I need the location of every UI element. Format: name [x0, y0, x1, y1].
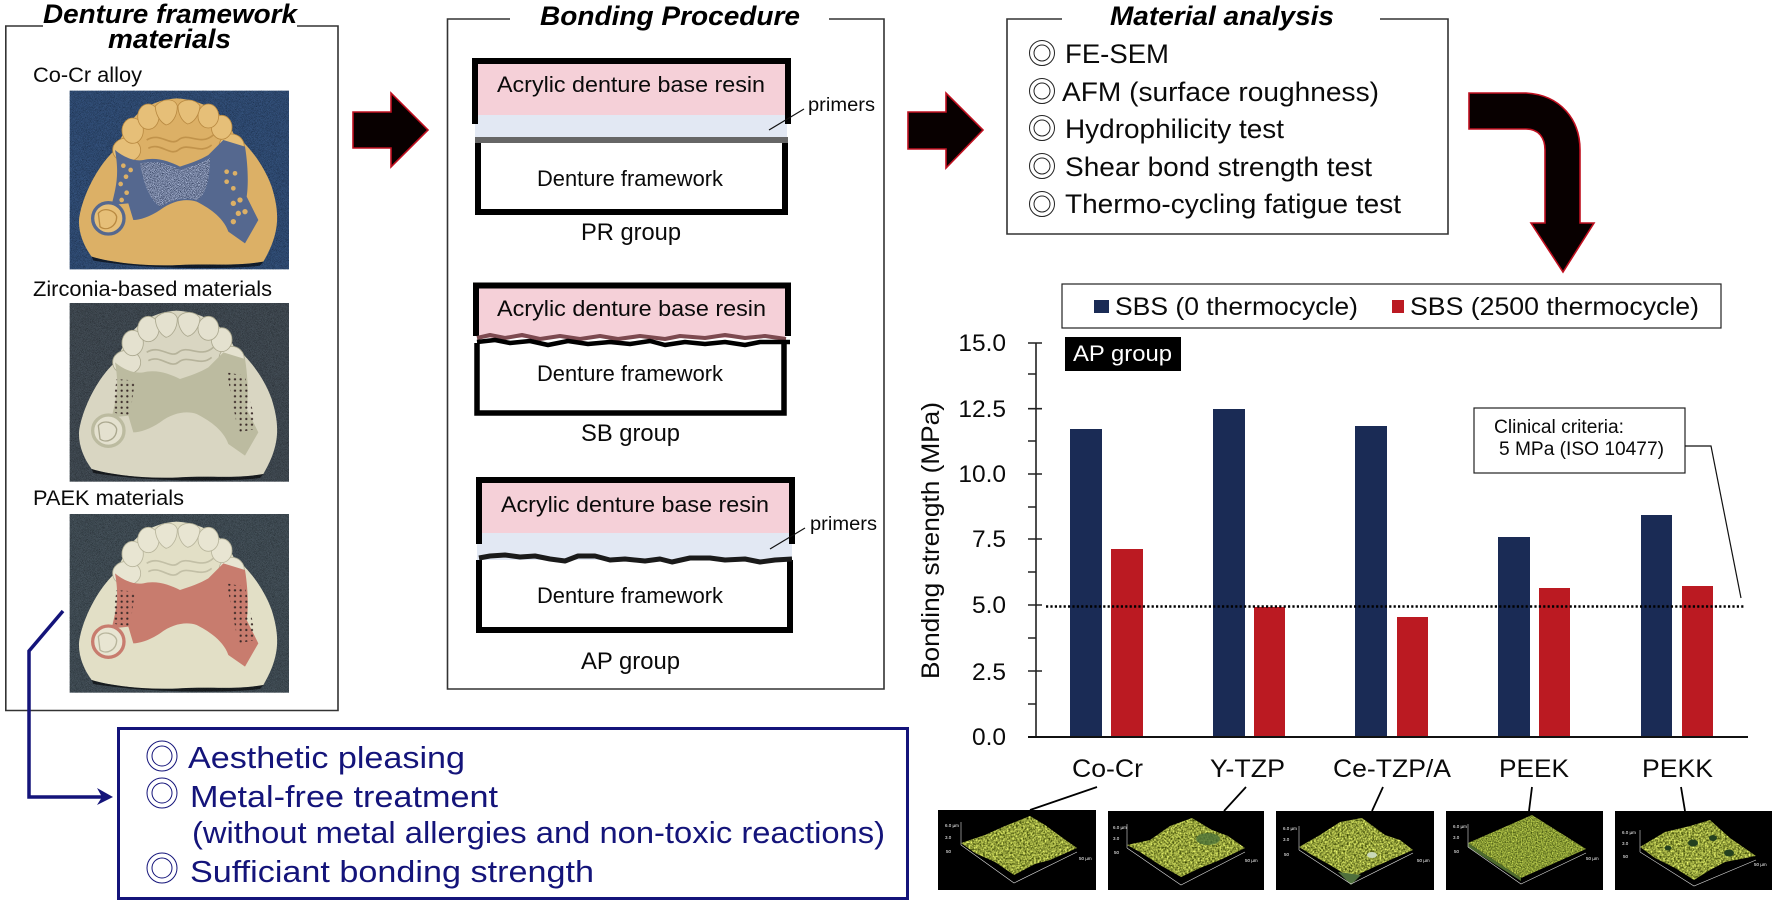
group tag: AP group: AP group [1073, 341, 1172, 366]
label: PAEK materials: PAEK materials [33, 486, 184, 510]
photo: PAEK framework on cast [70, 514, 289, 693]
AFM thumbnail: Ce-TZP/A: 50 [1284, 852, 1290, 857]
AFM thumbnail: Ce-TZP/A: 3.0 [1283, 837, 1290, 842]
list: analysis methods: FE-SEM [1065, 39, 1169, 69]
AFM thumbnail: Y-TZP: 50 µm [1245, 858, 1258, 863]
threshold line: 5 MPa [1046, 605, 1745, 608]
category labels: Co-Cr [1072, 755, 1143, 783]
AFM thumbnail: PEKK [1615, 787, 1772, 890]
diagram: SB group: Denture framework [537, 361, 724, 386]
heading: bonding procedure: Bonding Procedure [540, 1, 800, 31]
arrow: bonding to analysis [908, 93, 983, 168]
AFM thumbnail: PEEK: 6.0 µm [1453, 824, 1467, 829]
diagram: PR group: Denture framework [537, 166, 724, 191]
list: analysis methods: Hydrophilicity test [1065, 114, 1285, 144]
list: analysis methods: Shear bond strength test [1065, 152, 1373, 182]
AFM thumbnail: Co-Cr: 3.0 [945, 835, 952, 840]
benefits text: (without metal allergies and non-toxic reactions) [192, 815, 885, 850]
arrow: materials to bonding [353, 93, 428, 167]
bars: Co-Cr [1070, 429, 1143, 736]
AFM thumbnail: Y-TZP [1108, 787, 1264, 890]
callout: clinical criteria: 5 MPa (ISO 10477) [1499, 439, 1664, 460]
arrow: analysis to chart [1469, 93, 1594, 272]
y axis with ticks [1028, 343, 1748, 737]
photo: zirconia-based framework on cast [70, 303, 289, 482]
AFM thumbnail: PEEK: 3.0 [1453, 835, 1460, 840]
AFM thumbnail: Ce-TZP/A: 50 µm [1417, 858, 1430, 863]
y axis tick labels: 2.5 [972, 659, 1006, 686]
benefits text: Aesthetic pleasing [188, 740, 465, 775]
chart legend [1062, 284, 1721, 328]
y axis tick labels: 10.0 [958, 461, 1006, 488]
bars: PEEK [1498, 537, 1570, 736]
panel: benefits of PAEK [118, 728, 908, 898]
AFM thumbnail: Y-TZP: 6.0 µm [1113, 825, 1127, 830]
diagram: AP group: AP group [581, 648, 680, 675]
AFM thumbnail: PEKK: 3.0 [1622, 841, 1629, 846]
bullet icons [147, 741, 177, 883]
diagram: SB group: SB group [581, 420, 680, 447]
diagram: PR group: primers [808, 95, 875, 116]
bar chart: bonding strength [917, 330, 1748, 783]
y axis tick labels: 0.0 [972, 724, 1006, 751]
y axis tick labels: 5.0 [972, 592, 1006, 619]
AFM thumbnail: PEKK: 50 µm [1754, 862, 1767, 867]
AFM thumbnail: PEEK: 50 [1454, 849, 1460, 854]
callout: clinical criteria: Clinical criteria: [1494, 417, 1624, 438]
panel: bonding procedure [448, 1, 884, 689]
AFM thumbnail: PEKK: 50 [1623, 854, 1629, 859]
bars: Y-TZP [1213, 409, 1285, 736]
AFM thumbnail: Co-Cr: 6.0 µm [945, 823, 959, 828]
y axis tick labels [958, 330, 1006, 751]
panel: material analysis [1007, 1, 1448, 234]
label: Co-Cr alloy: Co-Cr alloy [33, 63, 142, 87]
group tag: AP group [1065, 337, 1181, 371]
y axis title: Bonding strength (MPa) [917, 402, 945, 679]
diagram: PR group: Acrylic denture base resin [497, 72, 765, 97]
connector arrow: PAEK to benefits [29, 611, 113, 805]
AFM thumbnail: Y-TZP: 3.0 [1113, 836, 1120, 841]
chart legend: SBS (0 thermocycle) [1115, 293, 1358, 321]
bars: Ce-TZP/A [1355, 426, 1428, 736]
diagram: AP group [477, 480, 877, 675]
AFM thumbnail: Y-TZP: 50 [1114, 850, 1120, 855]
benefits text: Sufficiant bonding strength [190, 854, 594, 889]
benefits text [188, 740, 885, 889]
y axis tick labels: 7.5 [972, 526, 1006, 553]
category labels [1072, 755, 1713, 783]
benefits text: Metal-free treatment [190, 779, 498, 814]
AFM thumbnail: Ce-TZP/A: 6.0 µm [1283, 826, 1297, 831]
list: analysis methods: Thermo-cycling fatigue test [1065, 189, 1402, 219]
AFM thumbnail: Co-Cr [938, 787, 1097, 890]
heading: material analysis: Material analysis [1110, 1, 1334, 31]
diagram: SB group: Acrylic denture base resin [497, 296, 766, 321]
diagram: SB group [476, 286, 790, 447]
AFM thumbnail: Co-Cr: 50 [946, 849, 952, 854]
photo: Co-Cr alloy framework on cast [70, 91, 289, 269]
y axis tick labels: 15.0 [958, 330, 1006, 357]
category labels: PEKK [1642, 755, 1713, 783]
callout: clinical criteria [1474, 408, 1741, 598]
heading: denture framework materials: materials [108, 24, 231, 54]
AFM thumbnail: Co-Cr: 50 µm [1079, 856, 1092, 861]
AFM thumbnail: Ce-TZP/A [1276, 787, 1434, 890]
category labels: PEEK [1499, 755, 1569, 783]
AFM thumbnail: PEKK: 6.0 µm [1622, 830, 1636, 835]
category labels: Ce-TZP/A [1333, 755, 1451, 783]
list: analysis methods: AFM (surface roughness) [1062, 77, 1379, 107]
bars: PEKK [1641, 515, 1713, 736]
diagram: AP group: Acrylic denture base resin [501, 492, 769, 517]
AFM thumbnail: PEEK [1446, 787, 1603, 890]
AFM thumbnail: PEEK: 50 µm [1586, 856, 1599, 861]
chart legend: SBS (2500 thermocycle) [1410, 293, 1699, 321]
y axis tick labels: 12.5 [958, 396, 1006, 423]
diagram: AP group: primers [810, 514, 877, 535]
diagram: PR group: PR group [581, 219, 681, 246]
label: zirconia-based materials: Zirconia-based materials [33, 277, 272, 301]
panel: denture framework materials [6, 0, 338, 710]
heading: denture framework materials [43, 0, 299, 54]
list: analysis methods [1030, 39, 1402, 219]
diagram: AP group: Denture framework [537, 583, 724, 608]
diagram: PR group [475, 61, 875, 246]
category labels: Y-TZP [1210, 755, 1285, 783]
